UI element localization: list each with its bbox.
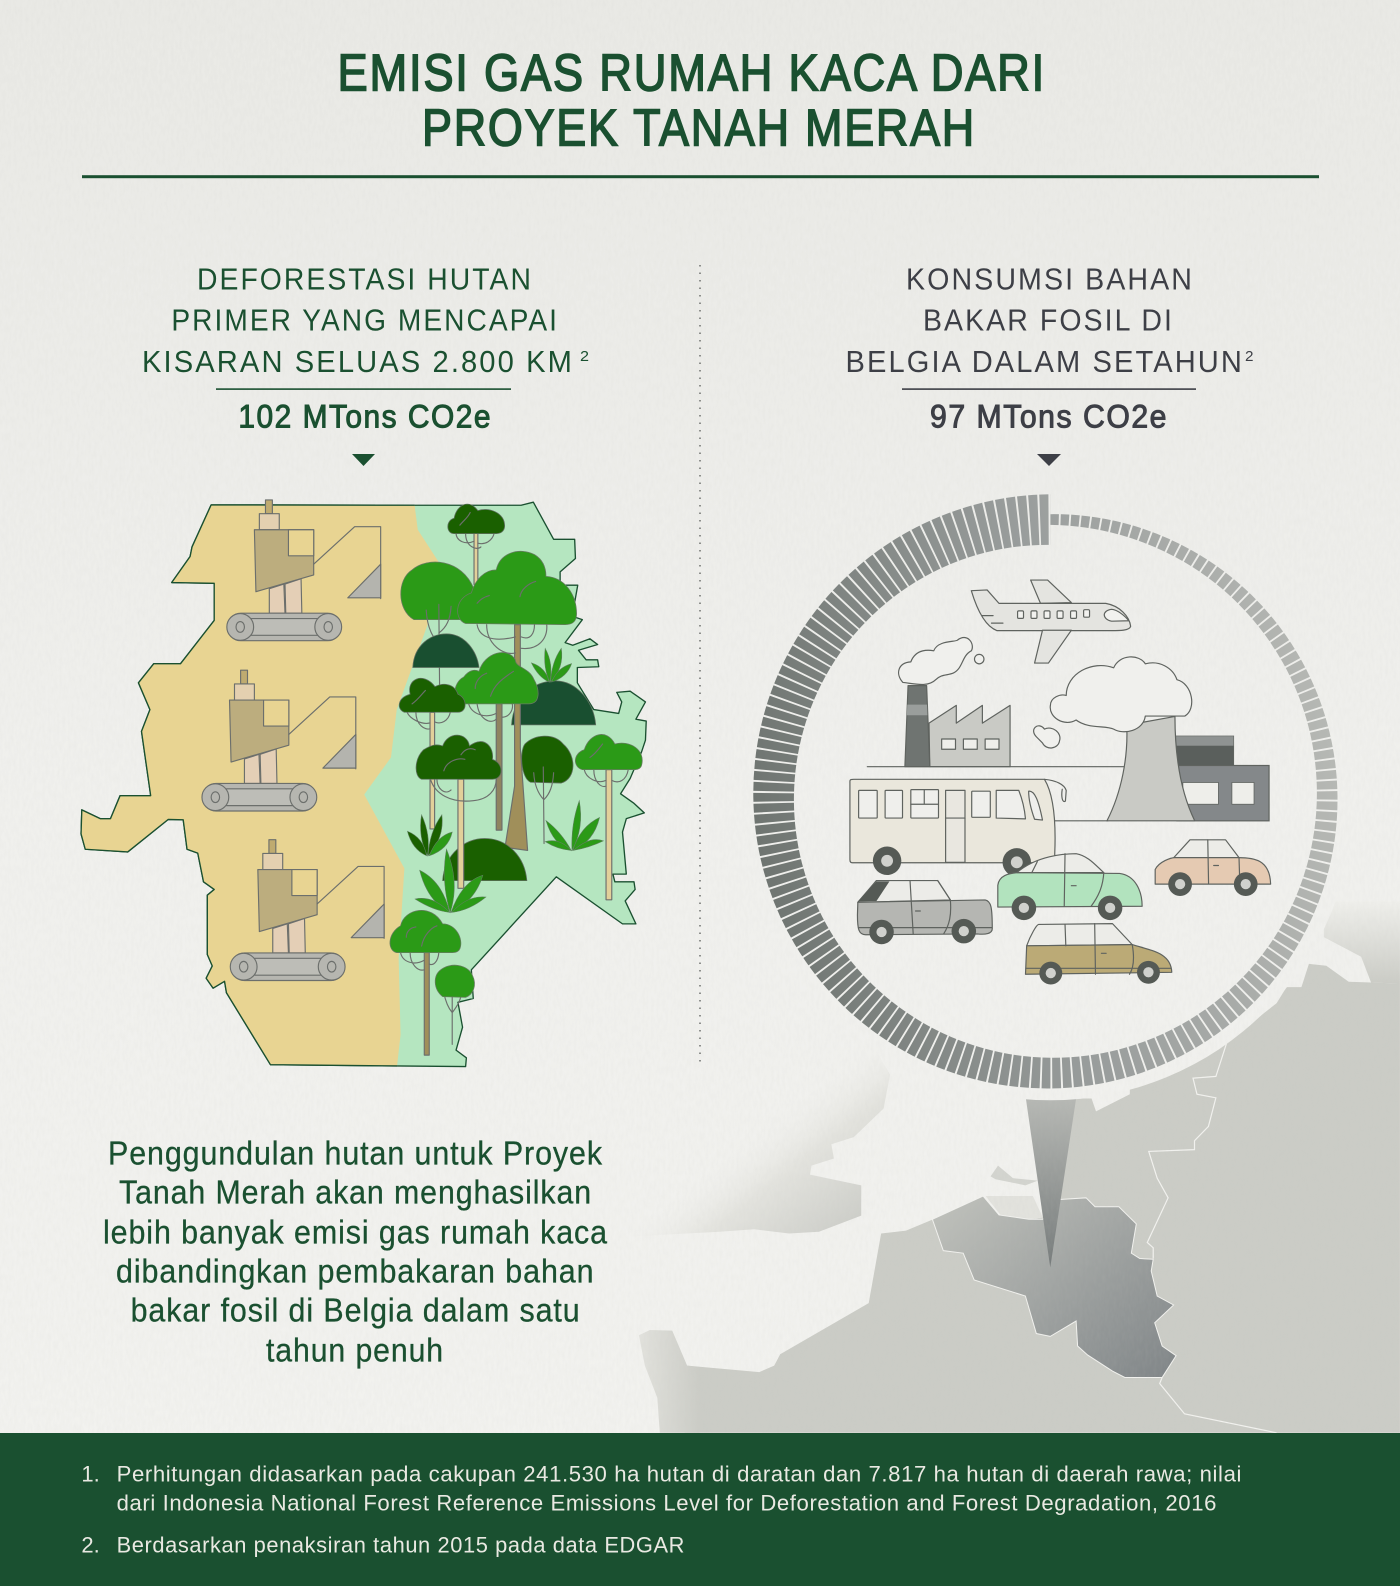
tree: tall main trunk with canopy [458, 551, 577, 850]
title: EMISI GAS RUMAH KACA DARI [338, 45, 1046, 103]
body paragraph: tahun penuh [266, 1332, 444, 1369]
center dotted divider [699, 265, 701, 1065]
left heading: deforestation: 2 [580, 348, 589, 365]
plant: big fern [415, 849, 486, 912]
body paragraph: bakar fosil di Belgia dalam satu [131, 1292, 581, 1329]
icon: grey car [857, 881, 992, 944]
footnote 1 [81, 1462, 1242, 1516]
plant: right fern [545, 801, 603, 850]
footnote 1: 1. [81, 1462, 100, 1487]
map: north-east fade [1324, 901, 1400, 984]
forest illustration [390, 504, 642, 1055]
tree: dark round tree [522, 736, 573, 844]
icon: excavator 3 [230, 840, 384, 981]
tree: bottom bright tree [390, 910, 461, 1055]
tree: dark spreading tree [416, 735, 501, 888]
icon: power station building [1175, 736, 1269, 821]
left heading: deforestation [142, 262, 589, 466]
map: Belgium highlighted [932, 1196, 1176, 1377]
ground lines [867, 767, 1124, 821]
tree: large round tree [401, 562, 474, 687]
body paragraph: lebih banyak emisi gas rumah kaca [103, 1213, 608, 1250]
map: estuary patch [986, 1196, 1043, 1219]
body paragraph: dibandingkan pembakaran bahan [116, 1252, 594, 1289]
chart: circular tick ring [753, 494, 1338, 1088]
right heading: fossil fuels: BELGIA DALAM SETAHUN [846, 345, 1244, 379]
left heading: deforestation: KISARAN SELUAS 2.800 KM [142, 345, 574, 379]
left heading: deforestation: DEFORESTASI HUTAN [197, 262, 533, 296]
tree: bottom small round tree [435, 965, 474, 1044]
map: mainland [685, 964, 1400, 1433]
pointer from circle to Belgium [1026, 1099, 1076, 1267]
icon: airplane [971, 580, 1131, 663]
icon: factory with chimney and smoke [899, 638, 1010, 767]
icon: excavator 1 [227, 500, 381, 641]
tree: small top tree [448, 504, 505, 584]
body paragraph: Tanah Merah akan menghasilkan [119, 1174, 592, 1210]
title: PROYEK TANAH MERAH [422, 99, 976, 157]
tree: left dark tree [399, 678, 465, 829]
title [338, 45, 1046, 157]
footnote 2: 2. [81, 1533, 100, 1558]
dark hill shrub 3 [443, 839, 527, 881]
cleared land area [80, 504, 438, 1067]
plant: top fern [531, 648, 572, 682]
footnote 2: Berdasarkan penaksiran tahun 2015 pada data EDGAR [117, 1533, 685, 1558]
right heading: fossil fuels: 97 MTons CO2e [930, 398, 1168, 434]
map: western coast [639, 1330, 700, 1433]
right heading: fossil fuels: 2 [1245, 348, 1254, 365]
dark hill shrub 1 [413, 634, 479, 667]
plant: dark fern [407, 815, 452, 856]
background map of Belgium and neighbours [620, 901, 1400, 1433]
right heading: fossil fuels: BAKAR FOSIL DI [923, 304, 1174, 338]
forest land base [81, 502, 646, 1067]
right heading: fossil fuels: KONSUMSI BAHAN [906, 262, 1194, 296]
icon: bus [850, 779, 1066, 877]
footnote 1: dari Indonesia National Forest Reference Emissions Level for Deforestation and Forest Degradation, 2016 [117, 1491, 1217, 1516]
icon: green car [998, 854, 1142, 920]
icon: cooling tower with cloud [1034, 657, 1195, 821]
footer notes band [0, 1433, 1400, 1586]
map: estuary inlet [991, 1166, 1038, 1185]
body paragraph [103, 1134, 608, 1369]
body paragraph: Penggundulan hutan untuk Proyek [108, 1134, 603, 1171]
icon: peach car [1155, 840, 1271, 896]
map: country borders [1147, 1042, 1277, 1433]
tree: mid bright tree [455, 653, 538, 830]
tree: right bright tree [575, 734, 642, 900]
icon: excavator 2 [202, 670, 356, 811]
dark hill shrub 2 [512, 681, 596, 725]
panel: Papua deforestation map [81, 500, 646, 1067]
left heading: deforestation: 102 MTons CO2e [238, 398, 492, 434]
right heading: fossil fuels [846, 262, 1254, 466]
icon: tan estate car [1025, 924, 1172, 985]
left heading: deforestation: PRIMER YANG MENCAPAI [171, 304, 559, 338]
panel: Belgium fossil fuel circle [753, 494, 1338, 1088]
circle halo over map [746, 492, 1354, 1100]
footnote 1: Perhitungan didasarkan pada cakupan 241.530 ha hutan di daratan dan 7.817 ha hutan di daerah rawa; nilai [117, 1462, 1242, 1487]
map: United Kingdom fade [620, 1034, 890, 1237]
